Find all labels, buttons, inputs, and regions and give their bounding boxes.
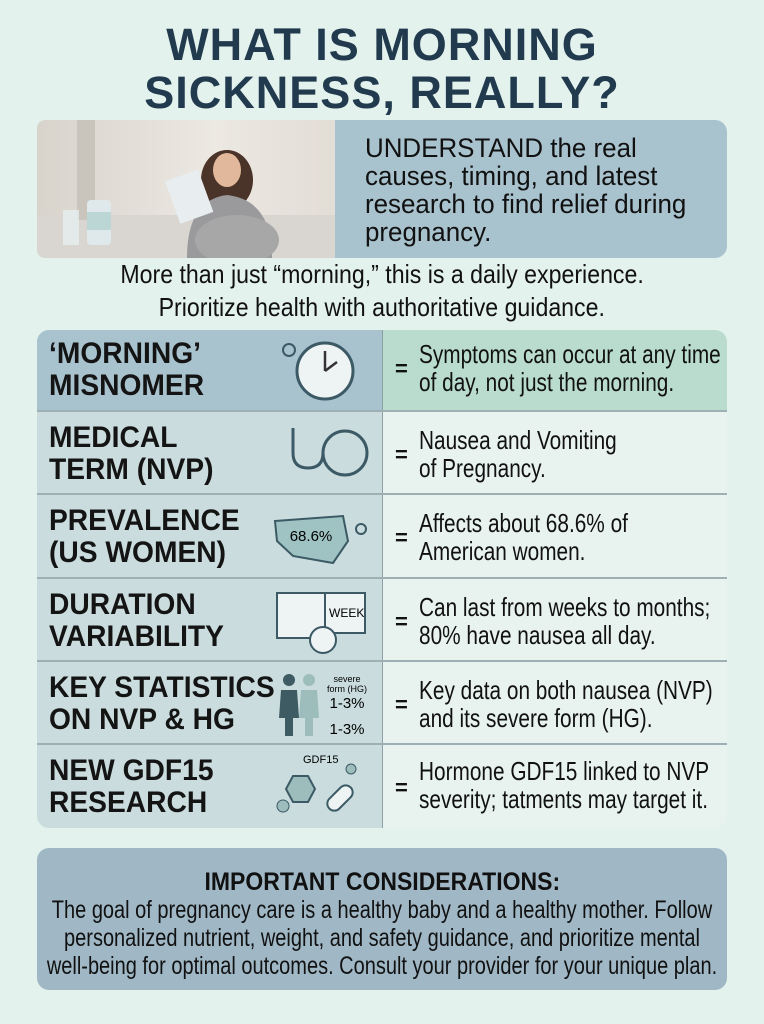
row: morning misnomer: MISNOMER — [49, 369, 204, 402]
row: duration — [37, 577, 727, 660]
row: GDF15 research: Hormone GDF15 linked to NVP — [419, 756, 709, 786]
row: duration: VARIABILITY — [49, 620, 224, 653]
row: GDF15 research: severity; tatments may target it. — [419, 784, 708, 814]
icon: US map 68.6%: 68.6% — [290, 528, 332, 545]
icon: molecule and pill — [276, 754, 356, 812]
important considerations box — [37, 848, 727, 990]
row: GDF15 research — [37, 743, 727, 828]
intro panel — [335, 120, 727, 258]
icon: US map 68.6% — [274, 515, 367, 564]
row: medical term: of Pregnancy. — [419, 453, 546, 483]
photo: pregnant woman — [37, 120, 335, 258]
icon: women figures: 1-3% — [329, 695, 365, 712]
row: medical term: TERM (NVP) — [49, 453, 214, 486]
row: key statistics — [37, 660, 727, 743]
row: GDF15 research: = — [395, 775, 408, 800]
icon: calendar week — [276, 592, 366, 654]
important considerations box: IMPORTANT CONSIDERATIONS: — [204, 868, 560, 896]
row: morning misnomer: = — [395, 356, 408, 381]
row: medical term — [37, 410, 727, 493]
subtitle — [120, 259, 644, 322]
row: duration: = — [395, 609, 408, 634]
icon: women figures: severe — [333, 674, 361, 684]
important considerations box: personalized nutrient, weight, and safety guidance, and prioritize mental — [64, 924, 700, 952]
row: duration: 80% have nausea all day. — [419, 620, 656, 650]
row: prevalence: Affects about 68.6% of — [419, 508, 628, 538]
row: GDF15 research: NEW GDF15 — [49, 754, 214, 787]
row: prevalence: = — [395, 525, 408, 550]
row: duration: Can last from weeks to months; — [419, 592, 710, 622]
row: medical term: = — [395, 442, 408, 467]
icon: women figures: 1-3% — [329, 721, 365, 738]
title: WHAT IS MORNING — [166, 19, 598, 70]
table — [37, 330, 727, 828]
important considerations box: well-being for optimal outcomes. Consult your provider for your unique plan. — [47, 952, 717, 980]
title — [144, 19, 620, 118]
row: key statistics: ON NVP & HG — [49, 703, 235, 736]
row: prevalence: American women. — [419, 536, 585, 566]
row: key statistics: KEY STATISTICS — [49, 671, 275, 704]
row: prevalence: (US WOMEN) — [49, 536, 226, 569]
subtitle: Prioritize health with authoritative guidance. — [159, 292, 605, 322]
intro panel: UNDERSTAND the real — [365, 133, 637, 163]
intro panel: causes, timing, and latest — [365, 161, 657, 191]
row: morning misnomer — [37, 330, 727, 410]
row: key statistics: and its severe form (HG). — [419, 703, 652, 733]
row: GDF15 research: RESEARCH — [49, 786, 207, 819]
row: key statistics: = — [395, 692, 408, 717]
row: medical term: MEDICAL — [49, 421, 177, 454]
row: prevalence — [37, 493, 727, 577]
icon: clock — [282, 342, 354, 400]
subtitle: More than just “morning,” this is a daily experience. — [120, 259, 644, 289]
intro panel: research to find relief during — [365, 189, 686, 219]
icon: stethoscope — [292, 428, 368, 476]
important considerations box: The goal of pregnancy care is a healthy baby and a healthy mother. Follow — [52, 896, 712, 924]
row: key statistics: Key data on both nausea (NVP) — [419, 675, 713, 705]
icon: calendar week: WEEK — [329, 606, 364, 620]
icon: molecule and pill: GDF15 — [303, 754, 338, 766]
intro panel: pregnancy. — [365, 217, 491, 247]
row: morning misnomer: of day, not just the morning. — [419, 367, 674, 397]
row: morning misnomer: ‘MORNING’ — [49, 337, 201, 370]
title: SICKNESS, REALLY? — [144, 67, 620, 118]
row: morning misnomer: Symptoms can occur at any time — [419, 339, 721, 369]
icon: women figures: form (HG) — [327, 684, 367, 694]
row: medical term: Nausea and Vomiting — [419, 425, 617, 455]
row: prevalence: PREVALENCE — [49, 504, 240, 537]
icon: women figures — [279, 674, 367, 738]
row: duration: DURATION — [49, 588, 196, 621]
